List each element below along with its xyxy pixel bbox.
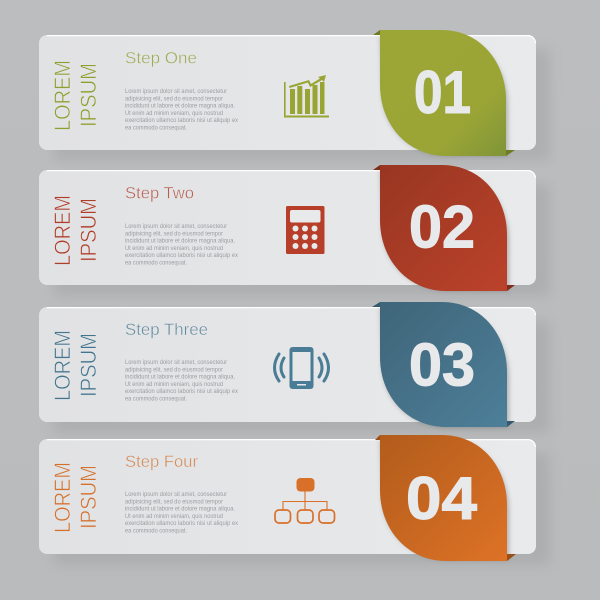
step title: Step Two — [125, 184, 194, 202]
vertical heading: lorem ipsum: LOREM — [50, 60, 75, 131]
paragraph: exercitation ullamco laboris nisi ut aliquip ex — [125, 117, 238, 124]
paragraph: ea commodo consequat. — [125, 528, 187, 534]
icon: vibrating phone — [274, 347, 328, 389]
paragraph: exercitation ullamco laboris nisi ut aliquip ex — [125, 252, 238, 259]
vertical heading: lorem ipsum — [50, 60, 101, 131]
paragraph: exercitation ullamco laboris nisi ut aliquip ex — [125, 520, 238, 527]
ribbon leaf with number 02: 02 — [409, 194, 475, 260]
step title: Step One — [125, 48, 197, 68]
panel: step two — [39, 165, 550, 296]
vertical heading: lorem ipsum — [50, 330, 101, 401]
paragraph: incididunt ut labore et dolore magna aliqua. — [125, 506, 235, 513]
ribbon leaf with number 01 — [373, 30, 515, 156]
ribbon leaf with number 04: 04 — [406, 465, 478, 532]
paragraph: Ut enim ad minim veniam, quis nostrud — [125, 245, 223, 252]
paragraph: ea commodo consequat. — [125, 396, 187, 402]
vertical heading: lorem ipsum: IPSUM — [76, 465, 101, 529]
paragraph: incididunt ut labore et dolore magna aliqua. — [125, 103, 235, 110]
ribbon leaf with number 04 — [375, 435, 516, 561]
paragraph: exercitation ullamco laboris nisi ut aliquip ex — [125, 388, 238, 395]
vertical heading: lorem ipsum — [50, 462, 101, 533]
paragraph: ea commodo consequat. — [125, 260, 187, 266]
vertical heading: lorem ipsum: LOREM — [50, 462, 75, 533]
paragraph: adipisicing elit, sed do eiusmod tempor — [125, 498, 223, 505]
paragraph: incididunt ut labore et dolore magna aliqua. — [125, 374, 235, 381]
step title: Step Four — [125, 452, 198, 471]
paragraph: Lorem ipsum dolor sit amet, consectetur — [125, 359, 227, 366]
vertical heading: lorem ipsum — [50, 195, 101, 266]
step title: Step Three — [125, 320, 208, 339]
paragraph: Lorem ipsum dolor sit amet, consectetur — [125, 88, 227, 95]
paragraph: Ut enim ad minim veniam, quis nostrud — [125, 381, 223, 388]
vertical heading: lorem ipsum: IPSUM — [76, 333, 101, 397]
paragraph: adipisicing elit, sed do eiusmod tempor — [125, 230, 223, 237]
vertical heading: lorem ipsum: IPSUM — [76, 198, 101, 262]
ribbon leaf with number 01: 01 — [414, 59, 471, 126]
paragraph: incididunt ut labore et dolore magna aliqua. — [125, 238, 235, 245]
paragraph: adipisicing elit, sed do eiusmod tempor — [125, 95, 223, 102]
panel: step four — [39, 435, 550, 565]
paragraph: Lorem ipsum dolor sit amet, consectetur — [125, 223, 227, 230]
paragraph: Lorem ipsum dolor sit amet, consectetur — [125, 491, 227, 498]
paragraph: Ut enim ad minim veniam, quis nostrud — [125, 513, 223, 520]
ribbon leaf with number 02 — [373, 165, 515, 291]
icon: bar chart with arrow — [284, 75, 329, 118]
vertical heading: lorem ipsum: LOREM — [50, 195, 75, 266]
panel: step one — [39, 30, 550, 161]
paragraph: ea commodo consequat. — [125, 124, 187, 132]
ribbon leaf with number 03 — [372, 302, 515, 428]
vertical heading: lorem ipsum: LOREM — [50, 330, 75, 401]
vertical heading: lorem ipsum: IPSUM — [76, 63, 101, 127]
paragraph: Ut enim ad minim veniam, quis nostrud — [125, 110, 223, 117]
icon: calculator — [286, 206, 324, 254]
icon: hierarchy diagram — [275, 478, 334, 523]
panel: step three — [39, 302, 550, 433]
ribbon leaf with number 03: 03 — [409, 332, 475, 398]
paragraph: adipisicing elit, sed do eiusmod tempor — [125, 366, 223, 373]
